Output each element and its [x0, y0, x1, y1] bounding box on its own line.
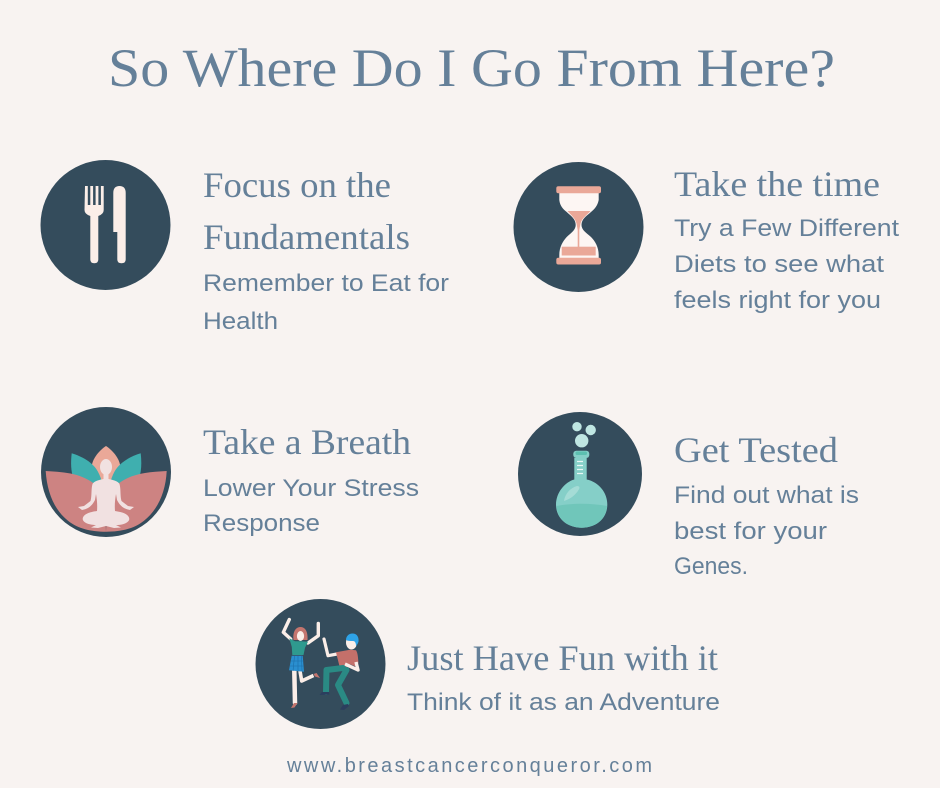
title: So Where Do I Go From Here? [108, 38, 835, 98]
heading: Take the time [674, 164, 880, 204]
icon: lotus meditation [41, 407, 171, 537]
heading: Just Have Fun with it [407, 638, 718, 678]
body text: Lower Your Stress [203, 475, 419, 502]
item: just have fun [256, 599, 720, 729]
body text line 3: Genes. [674, 553, 748, 580]
woman [283, 620, 320, 708]
body text line 2: Diets to see what [674, 251, 884, 278]
heading: Take a Breath [203, 422, 411, 462]
item: take the time [514, 162, 899, 314]
body text: Try a Few Different [674, 215, 899, 242]
body text line 3: feels right for you [674, 287, 881, 314]
body text line 2: Response [203, 510, 320, 537]
item: get tested [518, 412, 859, 580]
body text: Think of it as an Adventure [407, 689, 720, 716]
body text: Find out what is [674, 482, 859, 509]
body text line 2: Health [203, 308, 278, 335]
heading: Focus on the [203, 165, 391, 205]
item: take a breath [41, 407, 419, 537]
icon: dancing couple [256, 599, 386, 729]
heading line 2: Fundamentals [203, 217, 410, 257]
icon: fork and knife [40, 160, 170, 290]
icon: flask [518, 412, 642, 536]
icon: hourglass [514, 162, 644, 292]
man [320, 634, 359, 710]
item: focus on the fundamentals [40, 160, 449, 335]
body text: Remember to Eat for [203, 270, 449, 297]
heading: Get Tested [674, 430, 838, 470]
body text line 2: best for your [674, 518, 827, 545]
website url: www.breastcancerconqueror.com [286, 755, 652, 777]
